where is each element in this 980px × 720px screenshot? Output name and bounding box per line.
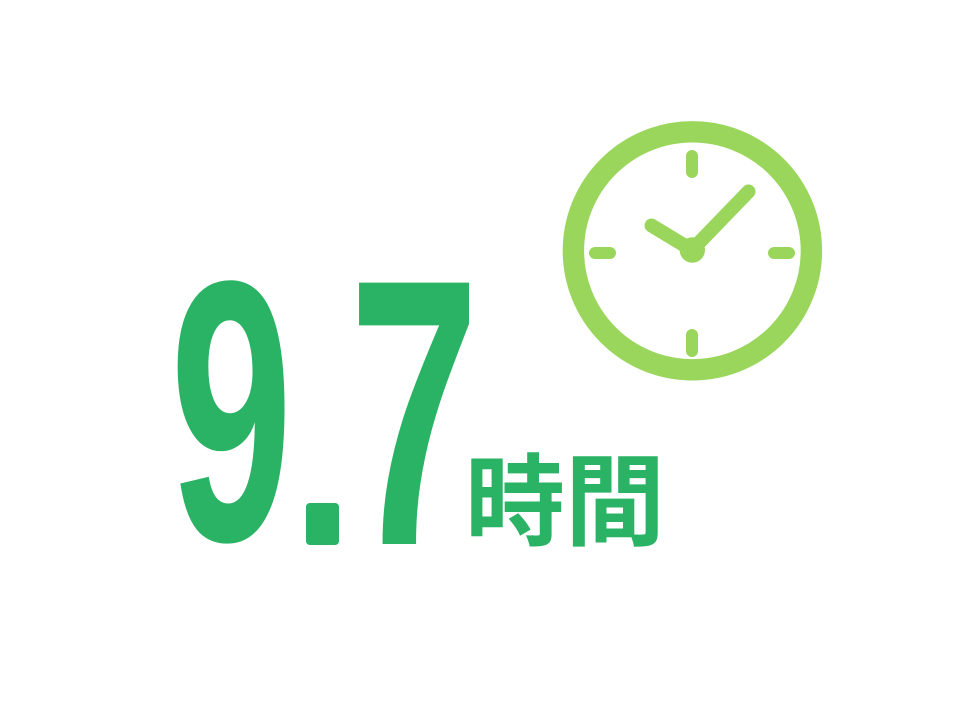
number: 9.7: 7 [349,200,479,625]
icon: clock [573,132,811,370]
unit: 時間: 時間 [465,448,665,560]
number: 9.7: 9 [170,203,293,619]
number: 9.7 [170,200,479,625]
